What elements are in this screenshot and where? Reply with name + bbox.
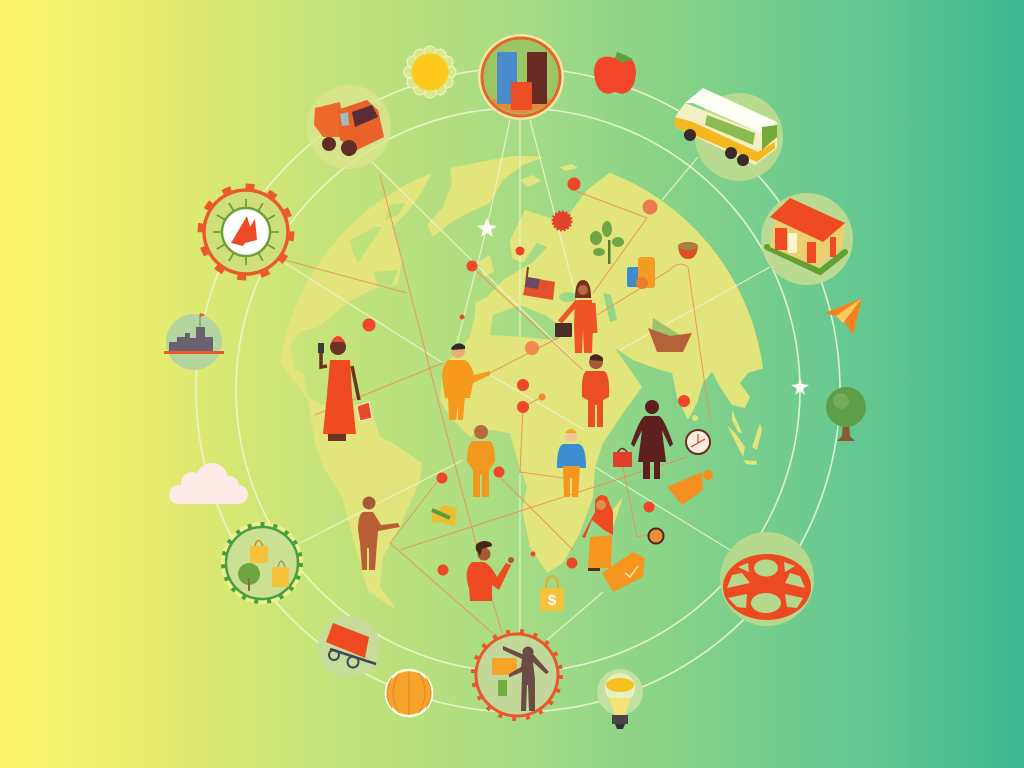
icon: small clock bbox=[648, 528, 664, 544]
person: woman dark silhouette bbox=[631, 400, 673, 479]
icon: flag bbox=[523, 267, 555, 300]
person: man brown suit bbox=[358, 496, 400, 570]
person: woman orange sari bbox=[582, 495, 613, 571]
icon: shopping bags badge bbox=[221, 522, 303, 604]
orbit icons bbox=[164, 34, 866, 729]
icon: person with sign badge bbox=[473, 631, 561, 719]
icon: light bulb bbox=[597, 669, 643, 729]
icon: clock bbox=[686, 430, 710, 454]
icon: cloud bbox=[169, 463, 248, 504]
person: man blue shirt bbox=[557, 429, 586, 497]
icon: leaf bbox=[432, 505, 457, 527]
icon: bowl bbox=[678, 242, 698, 259]
icon: red virus bbox=[553, 212, 571, 230]
icon: apple bbox=[594, 52, 636, 94]
icon: city skyline bbox=[164, 313, 224, 370]
icon: compass gear badge bbox=[200, 186, 292, 278]
icon: yellow bus bbox=[675, 88, 783, 181]
person: man orange shirt bbox=[442, 343, 490, 420]
person: man orange bbox=[467, 425, 495, 497]
icon: house bbox=[761, 193, 853, 285]
icon: paper plane bbox=[825, 298, 862, 335]
icon: sprout bbox=[590, 221, 624, 264]
map dots bbox=[362, 178, 690, 576]
continents bbox=[280, 156, 763, 610]
icon: price bag bbox=[540, 576, 564, 611]
icon: wheel badge bbox=[720, 532, 814, 626]
orbit rings bbox=[196, 68, 840, 712]
icon: melon bbox=[386, 670, 432, 716]
icon: books badge bbox=[478, 34, 564, 120]
person: man red suit bbox=[582, 354, 609, 427]
people bbox=[318, 280, 673, 601]
icon: orange truck bbox=[307, 85, 391, 169]
icon: basket bbox=[648, 318, 692, 352]
icon: red cart bbox=[318, 616, 380, 678]
person: man red shirt bbox=[467, 541, 514, 601]
icon: orange bottle bbox=[667, 470, 713, 505]
person: woman in red dress bbox=[318, 336, 372, 441]
connection lines bbox=[285, 120, 770, 640]
icon: cans bbox=[627, 257, 655, 289]
seas bbox=[350, 203, 617, 340]
icon: red bag bbox=[613, 448, 632, 467]
globe bbox=[280, 156, 763, 610]
icon: price bag: $ bbox=[548, 592, 557, 609]
stars bbox=[477, 218, 809, 395]
icon: orange suitcase bbox=[602, 552, 645, 592]
icon: tree bbox=[826, 387, 866, 441]
person: woman in business suit bbox=[555, 280, 595, 353]
icon: sun flower bbox=[404, 46, 456, 98]
